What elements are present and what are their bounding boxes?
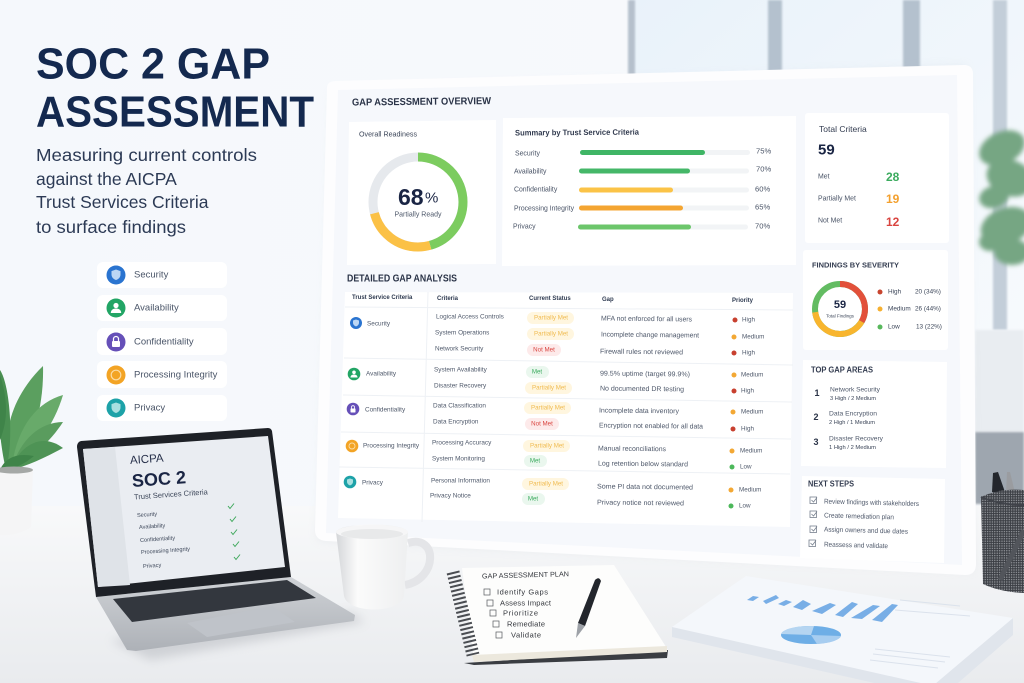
column: status badges: Partially Met	[529, 480, 563, 488]
column: gap: Manual reconciliations	[598, 446, 667, 453]
card: total criteria: Not Met	[818, 218, 842, 224]
card: next steps: Assign owners and due dates	[824, 527, 909, 536]
column: priority: Low	[740, 464, 752, 470]
blurred plant behind monitor	[973, 123, 1024, 265]
table: detailed gap analysis: Processing Integrity	[363, 442, 420, 450]
bar chart: 70%	[755, 222, 770, 230]
column: gap: No documented DR testing	[600, 386, 684, 393]
card: top gap areas: Network Security	[830, 386, 881, 394]
column: status badges: Not Met	[531, 420, 553, 428]
column: priority: High	[741, 388, 754, 394]
laptop screen: SOC 2	[131, 467, 187, 491]
pill: privacy	[97, 395, 227, 421]
laptop screen: Confidentiality	[140, 536, 175, 544]
column: criteria: System Monitoring	[432, 456, 485, 462]
card: top gap areas: 1	[814, 388, 820, 398]
icon: security	[350, 317, 362, 329]
card: top gap areas: 3 High / 2 Medium	[830, 396, 877, 402]
notebook text: Prioritize	[503, 608, 538, 618]
laptop screen: Privacy	[143, 563, 162, 570]
dashboard monitor panel	[315, 65, 976, 575]
card: overall readiness	[347, 120, 496, 265]
column: status badges	[522, 312, 574, 505]
card: findings by severity: 13 (22%)	[916, 324, 942, 330]
bar chart: Confidentiality	[514, 186, 558, 194]
column: gap: Firewall rules not reviewed	[600, 349, 683, 356]
bar chart: Availability	[514, 168, 547, 176]
report pie chart	[781, 626, 841, 644]
pen cup	[981, 472, 1024, 593]
icon: processing integrity	[346, 440, 358, 452]
pill: confidentiality: Confidentiality	[134, 336, 194, 348]
bar chart: Processing Integrity	[514, 206, 575, 212]
column: status badges: Partially Met	[534, 314, 568, 322]
column: priority: Medium	[741, 372, 763, 378]
pill: confidentiality	[97, 328, 227, 355]
card: total criteria: Partially Met	[818, 196, 856, 202]
card: findings by severity: 59	[834, 299, 846, 311]
card: overall readiness: 68	[398, 184, 424, 210]
notebook text: Remediate	[507, 620, 545, 628]
column: gap: Encryption not enabled for all data	[599, 423, 703, 431]
card: findings by severity	[803, 250, 948, 350]
column: status badges: Met	[532, 368, 542, 376]
notebook text: Identify Gaps	[497, 588, 548, 596]
column: gap: Privacy notice not reviewed	[597, 500, 684, 507]
laptop screen: Availability	[139, 523, 166, 531]
trackpad	[187, 606, 295, 637]
column: priority: Medium	[742, 334, 764, 340]
card: top gap areas: 3	[813, 437, 819, 447]
pill: availability: Availability	[134, 302, 179, 314]
bar chart: Security	[515, 150, 540, 158]
laptop screen: Trust Services Criteria	[134, 487, 209, 501]
notebook spiral	[453, 572, 473, 655]
column: gap: MFA not enforced for all users	[601, 316, 693, 323]
column: criteria: Network Security	[435, 346, 484, 352]
column: priority: High	[741, 426, 754, 432]
column: criteria	[430, 314, 504, 500]
subtitle: to surface findings	[36, 217, 186, 237]
card: top gap areas: TOP GAP AREAS	[811, 366, 874, 374]
column: criteria: Data Classification	[433, 402, 486, 410]
notebook text: Validate	[511, 630, 541, 640]
bar chart: 75%	[756, 146, 771, 156]
card: findings by severity: Total Findings	[826, 314, 855, 318]
column: status badges: Partially Met	[530, 442, 564, 450]
card: next steps: Review findings with stakeholders	[824, 499, 920, 508]
column: gap	[597, 316, 703, 507]
heading: gap assessment overview: GAP ASSESSMENT OVERVIEW	[352, 96, 492, 108]
subtitle: Measuring current controls	[36, 145, 257, 165]
pill: processing integrity	[97, 361, 227, 388]
notebook text: GAP ASSESSMENT PLAN	[482, 571, 569, 580]
bar chart	[513, 146, 771, 230]
subtitle: against the AICPA	[36, 169, 177, 189]
card: top gap areas: 2 High / 1 Medium	[829, 420, 876, 426]
table header: Criteria	[437, 296, 459, 302]
table: detailed gap analysis: Availability	[366, 370, 397, 378]
pill: availability	[97, 295, 227, 321]
table header: Current Status	[529, 296, 571, 302]
column: status badges: Partially Met	[534, 330, 568, 338]
card: total criteria: 19	[886, 192, 900, 206]
subtitle: Trust Services Criteria	[36, 192, 209, 212]
column: gap: 99.5% uptime (target 99.9%)	[600, 371, 690, 378]
icon: confidentiality	[347, 403, 359, 415]
table header	[352, 295, 754, 304]
column: status badges: Met	[530, 458, 540, 464]
column: status badges: Met	[528, 496, 538, 502]
pill: security: Security	[134, 270, 169, 280]
column: gap: Some PI data not documented	[597, 484, 693, 492]
pill: privacy: Privacy	[134, 402, 165, 414]
card: overall readiness: Overall Readiness	[359, 130, 417, 138]
column: criteria: Logical Access Controls	[436, 314, 504, 320]
card: total criteria: Met	[818, 174, 830, 180]
title: ASSESSMENT	[36, 88, 314, 136]
card: total criteria: Total Criteria	[819, 124, 867, 134]
card: findings by severity: 20 (34%)	[915, 288, 941, 296]
report bar chart	[747, 595, 898, 622]
column: criteria: Processing Accuracy	[432, 440, 492, 446]
column: gap: Log retention below standard	[598, 461, 688, 468]
table header: Priority	[732, 298, 754, 304]
column: priority: Medium	[741, 408, 763, 416]
card: total criteria: 59	[818, 142, 835, 158]
table header: Gap	[602, 297, 614, 303]
column: criteria: System Availability	[434, 366, 488, 374]
column: status badges: Not Met	[533, 346, 555, 354]
card: overall readiness: Partially Ready	[394, 212, 442, 218]
spiral notebook	[453, 565, 668, 665]
column: priority	[728, 316, 764, 510]
title: SOC 2 GAP	[36, 40, 270, 88]
card: top gap areas: Disaster Recovery	[829, 436, 884, 442]
card: findings by severity: 26 (44%)	[915, 306, 941, 312]
card: total criteria: 28	[886, 170, 900, 184]
card: next steps: Reassess and validate	[824, 542, 888, 550]
donut chart: readiness	[373, 157, 463, 247]
icon: availability	[348, 368, 360, 380]
table: detailed gap analysis	[338, 292, 793, 527]
notebook text: Assess Impact	[500, 598, 552, 608]
bar chart: Privacy	[513, 224, 536, 230]
pen	[576, 578, 601, 638]
card: next steps: NEXT STEPS	[808, 480, 855, 488]
report text lines	[870, 600, 970, 668]
column: status badges: Partially Met	[531, 404, 565, 412]
card: overall readiness: %	[425, 190, 438, 206]
subtitle	[36, 145, 257, 237]
keyboard	[113, 580, 316, 622]
pill: processing integrity: Processing Integrity	[134, 370, 218, 380]
column: status badges: Partially Met	[532, 384, 566, 392]
donut chart: severity	[815, 284, 865, 334]
card: findings by severity: High	[888, 288, 902, 296]
laptop screen	[77, 428, 291, 597]
card: next steps: Create remediation plan	[824, 513, 894, 521]
criteria list	[97, 262, 227, 421]
table: detailed gap analysis: Privacy	[362, 480, 384, 486]
column: criteria: Privacy Notice	[430, 492, 471, 500]
laptop screen: Processing Integrity	[141, 547, 190, 556]
column: criteria: Personal Information	[431, 478, 490, 484]
laptop base	[96, 577, 355, 651]
card: summary by trust service criteria: Summary by Trust Service Criteria	[515, 128, 640, 137]
left plant with pot	[0, 366, 63, 535]
column: priority: Low	[739, 502, 751, 510]
card: top gap areas: 2	[813, 412, 819, 422]
card: total criteria	[805, 113, 949, 243]
card: findings by severity: Medium	[888, 306, 911, 312]
heading: detailed gap analysis: DETAILED GAP ANALYSIS	[347, 274, 457, 284]
table: detailed gap analysis: Confidentiality	[365, 406, 406, 414]
icon: privacy	[344, 476, 356, 488]
laptop	[77, 428, 365, 660]
bar chart: 65%	[755, 202, 770, 212]
card: total criteria: 12	[886, 215, 900, 229]
card: top gap areas: 1 High / 2 Medium	[829, 445, 877, 451]
report papers	[672, 576, 1013, 683]
card: findings by severity: FINDINGS BY SEVERITY	[812, 260, 899, 270]
table header: Trust Service Criteria	[352, 295, 413, 301]
card: top gap areas	[801, 360, 947, 468]
column: priority: Medium	[740, 448, 762, 454]
pill: security	[97, 262, 227, 288]
bar chart: 70%	[756, 164, 771, 174]
card: summary by trust service criteria	[502, 116, 796, 266]
notebook text	[482, 571, 569, 640]
column: priority: Medium	[739, 486, 761, 494]
card: next steps	[800, 476, 945, 563]
laptop screen: AICPA	[130, 453, 164, 467]
column: criteria: Disaster Recovery	[434, 382, 487, 390]
card: top gap areas: Data Encryption	[829, 410, 877, 418]
bar chart: 60%	[755, 184, 770, 194]
table: detailed gap analysis: Security	[367, 320, 391, 328]
column: criteria: Data Encryption	[433, 418, 479, 426]
column: priority: High	[742, 316, 755, 324]
column: criteria: System Operations	[435, 330, 489, 336]
column: gap: Incomplete data inventory	[599, 408, 680, 415]
coffee mug	[336, 524, 430, 610]
title	[36, 40, 314, 136]
card: findings by severity: Low	[888, 324, 900, 330]
laptop screen: Security	[137, 512, 158, 519]
column: priority: High	[742, 350, 755, 356]
column: gap: Incomplete change management	[601, 332, 699, 340]
